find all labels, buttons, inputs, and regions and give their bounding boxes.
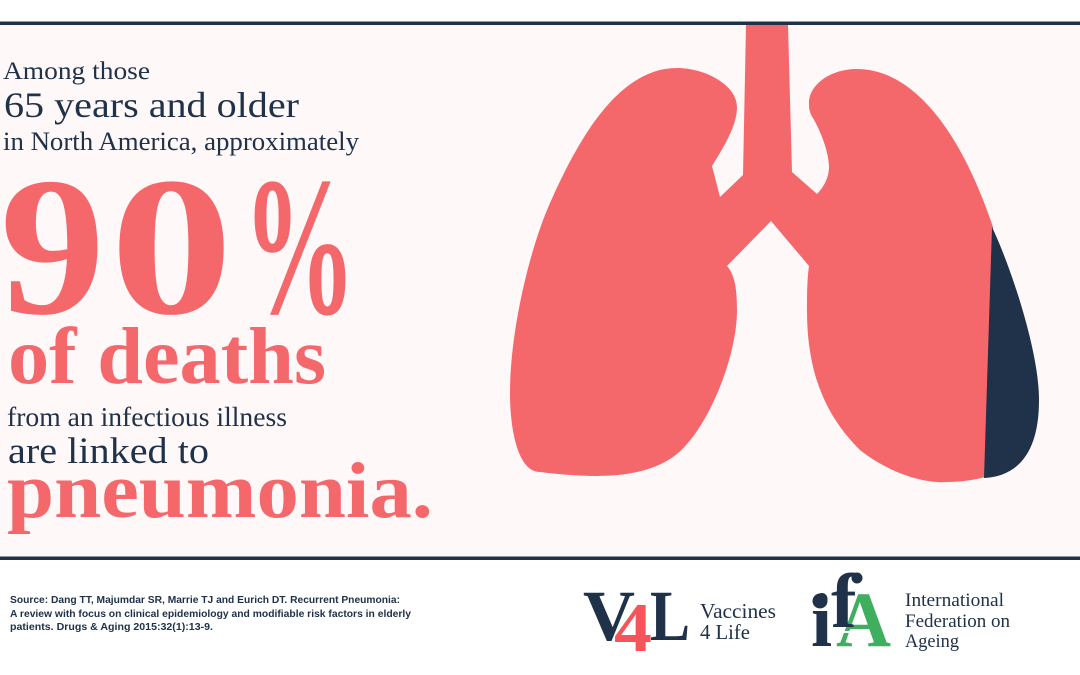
logo: International Federation on Ageing (811, 558, 1010, 663)
text: pneumonia: pneumonia. (7, 448, 433, 535)
logo: Vaccines 4 Life: V (583, 576, 635, 656)
text: 90%: % (243, 137, 356, 356)
text: 65 years and older: 65 years and older (4, 85, 299, 125)
text block: source citation: A review with focus on clinical epidemiology and modifiable risk factors in elderly (10, 609, 412, 620)
text: among those: Among those (3, 58, 150, 85)
text block: source citation: patients. Drugs & Aging 2015:32(1):13-9. (10, 622, 213, 633)
text: 90% (0, 137, 356, 356)
text: are linked to: are linked to (8, 431, 209, 472)
logo: International Federation on Ageing: International (905, 590, 1004, 611)
logo: International Federation on Ageing: A (836, 576, 891, 663)
logo: International Federation on Ageing: i (811, 579, 832, 663)
text: 90%: 9 (0, 137, 105, 356)
text block: source citation: Source: Dang TT, Majumdar SR, Marrie TJ and Eurich DT. Recurrent Pneumonia: (10, 595, 400, 606)
text: from an infectious illness: from an infectious illness (7, 402, 287, 432)
text block: headline statistic (0, 58, 433, 535)
logo: International Federation on Ageing: Federation on (905, 611, 1010, 632)
highlighted portion of right lung (984, 227, 1039, 478)
lungs and trachea shape (510, 25, 993, 482)
logo: International Federation on Ageing: f (831, 558, 858, 644)
logo: Vaccines 4 Life (583, 576, 776, 667)
text: 90%: 0 (110, 137, 233, 356)
text block: source citation (10, 595, 412, 633)
text: in North America: in North America, approximately (3, 127, 359, 156)
logo: Vaccines 4 Life: Vaccines (700, 599, 776, 623)
panel: main background (0, 24, 1080, 558)
logo: International Federation on Ageing: Ageing (905, 631, 959, 652)
logo: Vaccines 4 Life: 4 (614, 590, 652, 667)
logo: Vaccines 4 Life: L (650, 576, 690, 656)
text: of deaths: of deaths (8, 313, 326, 401)
logo: Vaccines 4 Life: 4 Life (700, 620, 750, 644)
chart: lungs with 10 percent highlighted (510, 25, 1039, 482)
